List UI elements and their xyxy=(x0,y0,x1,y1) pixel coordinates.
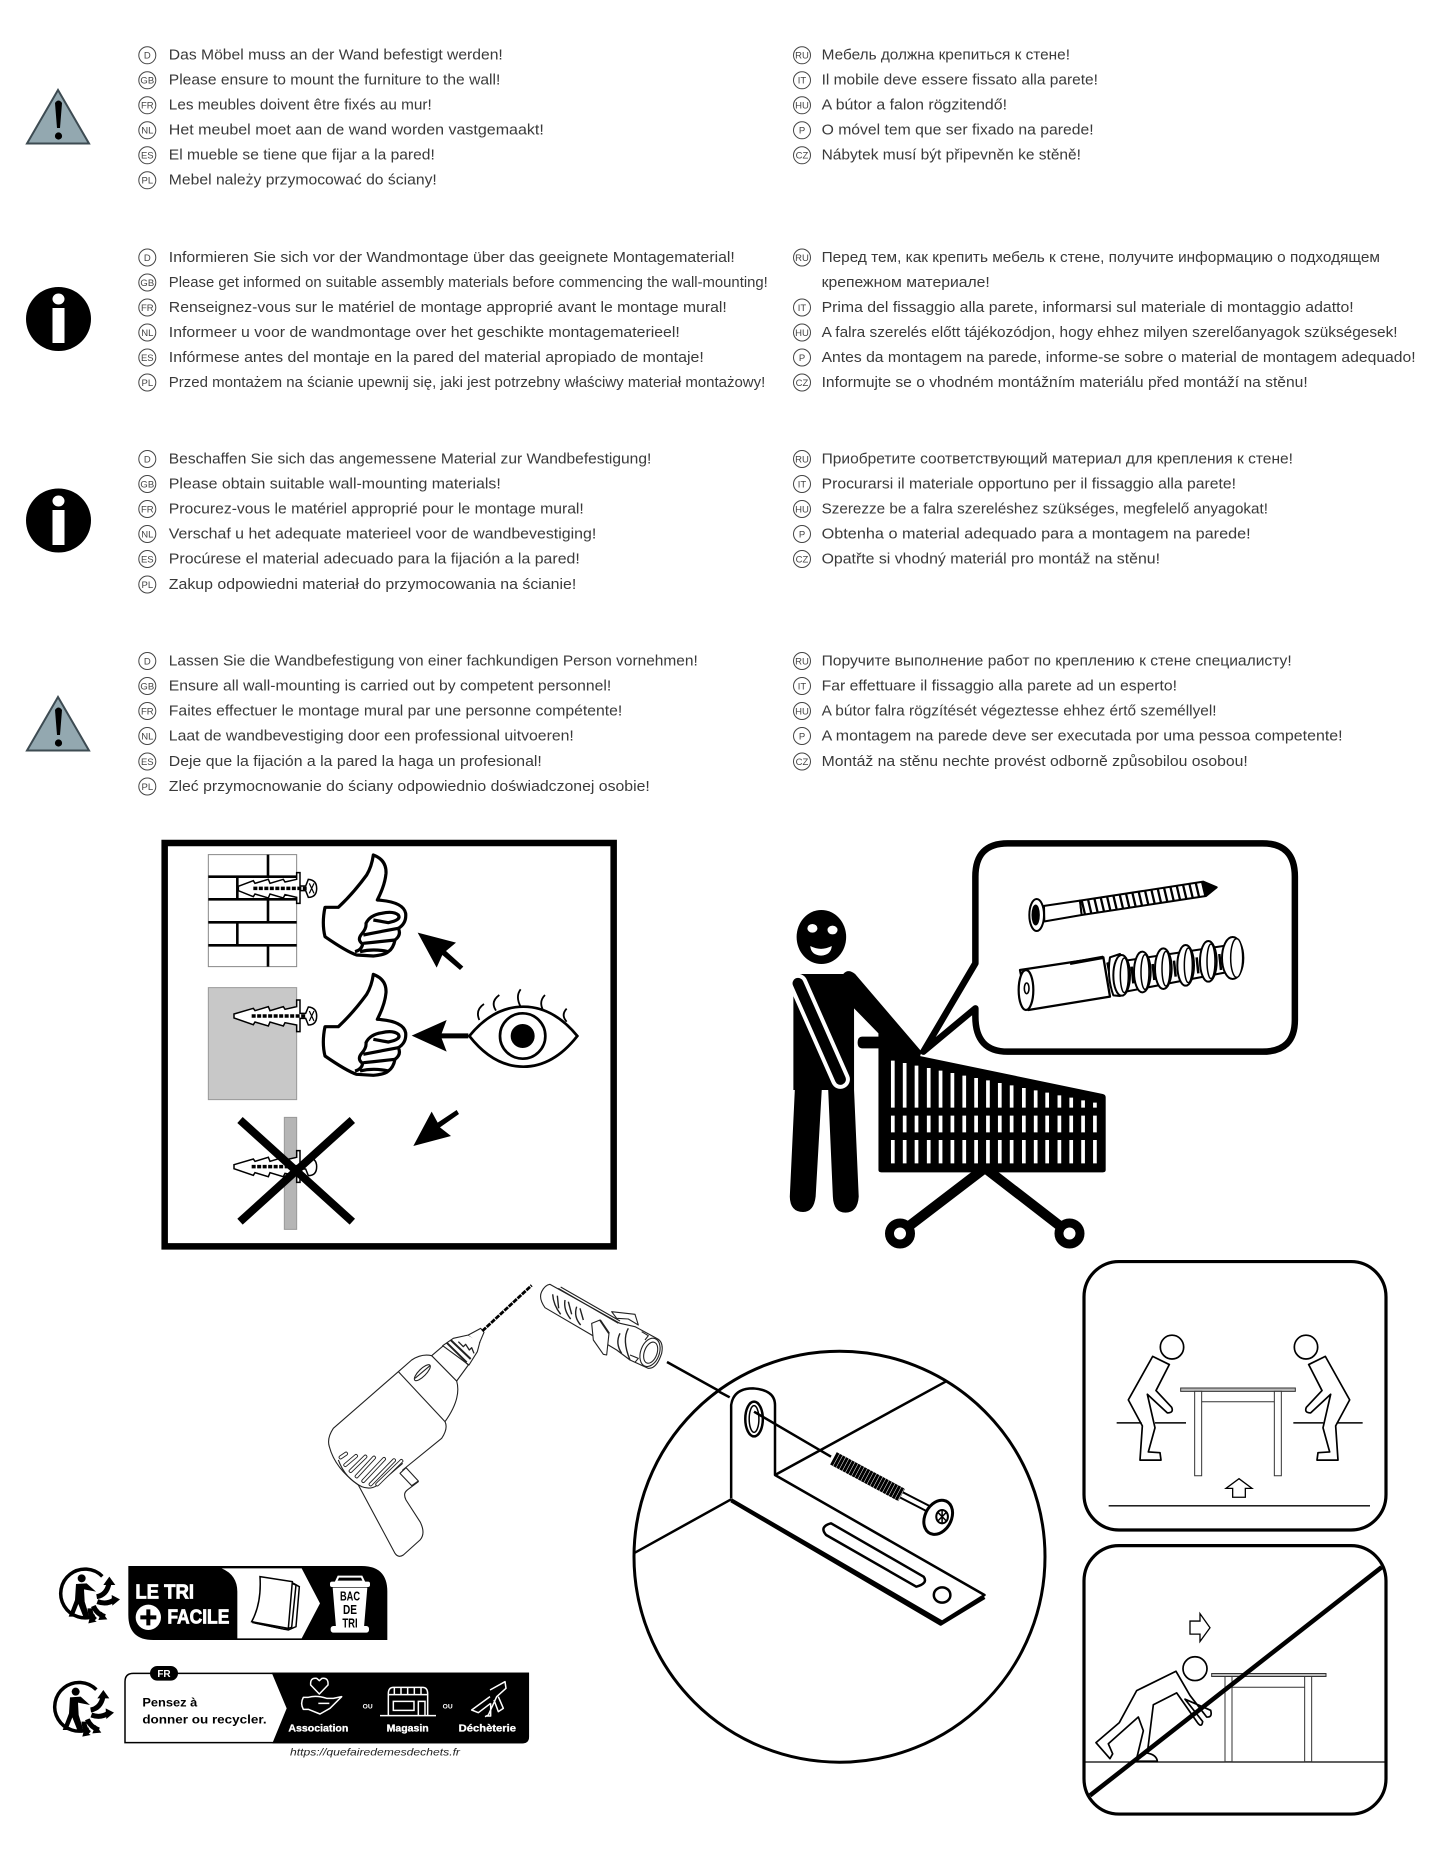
line HU: Szerezze be a falra szereléshez szükséges, megfelelő anyagokat! xyxy=(822,500,1268,518)
line CZ: Opatřte si vhodný materiál pro montáž na stěnu! xyxy=(822,550,1160,568)
line GB: GB xyxy=(140,278,154,289)
line CZ: Montáž na stěnu nechte provést odborně způsobilou osobou! xyxy=(822,753,1248,770)
line P: P xyxy=(799,731,805,742)
thin wall with anchor, crossed out xyxy=(234,1117,352,1229)
icon: paper stack xyxy=(252,1577,299,1630)
icon: waste sorting xyxy=(472,1682,506,1717)
text: magasin: Magasin xyxy=(387,1724,429,1735)
line CZ: CZ xyxy=(796,554,809,565)
label: pensez a donner ou recycler xyxy=(55,1666,529,1759)
icon: triman xyxy=(55,1682,114,1737)
text block: competent personnel, right column xyxy=(794,652,1343,770)
arrow: up left xyxy=(418,933,463,970)
line GB: Please ensure to mount the furniture to the wall! xyxy=(169,72,500,88)
line PL: PL xyxy=(141,782,153,793)
drill bit xyxy=(482,1285,532,1331)
info icon: obtain materials xyxy=(26,488,91,552)
line FR: FR xyxy=(141,706,154,717)
line CZ: Informujte se o vhodném montážním materiálu před montáží na stěnu! xyxy=(822,374,1308,391)
text block: competent personnel, left column xyxy=(139,652,698,795)
line PL: Mebel należy przymocować do ściany! xyxy=(169,172,437,188)
icon: sorting bin: BAC xyxy=(340,1590,360,1604)
line RU: Перед тем, как крепить мебель к стене, получите информацию о подходящем xyxy=(822,249,1380,266)
line D: Das Möbel muss an der Wand befestigt werden! xyxy=(169,46,503,64)
line NL: Informeer u voor de wandmontage over het geschikte montagematerieel! xyxy=(169,324,680,341)
line PL: PL xyxy=(141,176,153,187)
line D: Lassen Sie die Wandbefestigung von einer fachkundigen Person vornehmen! xyxy=(169,652,698,670)
line: drilling axis to bracket xyxy=(667,1362,730,1397)
cart wheels xyxy=(890,1168,1080,1244)
line IT: IT xyxy=(798,479,806,490)
icon: plus xyxy=(136,1605,161,1630)
chuck xyxy=(432,1344,468,1381)
line D: D xyxy=(144,656,151,667)
line NL: Laat de wandbevestiging door een professional uitvoeren! xyxy=(169,728,574,744)
icon: sorting bin xyxy=(330,1577,370,1633)
line PL: PL xyxy=(141,580,153,591)
line FR: FR xyxy=(141,101,154,112)
line FR: Renseignez-vous sur le matériel de montage approprié avant le montage mural! xyxy=(169,299,727,316)
line RU: Приобретите соответствующий материал для крепления к стене! xyxy=(822,450,1293,468)
line IT: Prima del fissaggio alla parete, informarsi sul materiale di montaggio adatto! xyxy=(822,299,1354,316)
line D: Informieren Sie sich vor der Wandmontage über das geeignete Montagematerial! xyxy=(169,249,735,266)
line GB: GB xyxy=(140,76,154,87)
line GB: GB xyxy=(140,681,154,692)
person xyxy=(790,910,922,1213)
line ES: El mueble se tiene que fijar a la pared! xyxy=(169,146,435,164)
text: le tri: LE TRI xyxy=(135,1581,194,1604)
line ES: Procúrese el material adecuado para la fijación a la pared! xyxy=(169,550,580,568)
text block: get informed, left column xyxy=(139,249,768,391)
black band xyxy=(128,1566,387,1640)
text: ou: OU xyxy=(363,1704,373,1711)
text block: obtain materials, right column xyxy=(794,450,1293,568)
black band xyxy=(272,1673,529,1743)
text: advice: Pensez à xyxy=(142,1697,198,1710)
arrow: lift up xyxy=(1226,1479,1252,1497)
line CZ: CZ xyxy=(796,151,809,162)
line RU: RU xyxy=(795,656,809,667)
text: advice xyxy=(142,1697,267,1726)
line: axis into circle xyxy=(719,1392,730,1397)
line RU: RU xyxy=(795,253,809,264)
bracket xyxy=(731,1388,984,1624)
line IT: IT xyxy=(798,681,806,692)
line NL: NL xyxy=(141,126,153,137)
line P: A montagem na parede deve ser executada por uma pessoa competente! xyxy=(822,728,1343,744)
panel: two people lifting table correctly xyxy=(1084,1262,1386,1530)
line RU: Мебель должна крепиться к стене! xyxy=(822,46,1070,64)
line PL: Zakup odpowiedni materiał do przymocowania na ścianie! xyxy=(169,576,576,593)
wall edges xyxy=(634,1382,946,1553)
label: le tri plus facile xyxy=(61,1566,387,1640)
info icon: get informed xyxy=(26,287,91,351)
panel: do not push table alone, crossed out xyxy=(1084,1546,1386,1814)
line NL: NL xyxy=(141,529,153,540)
icon: wall anchor xyxy=(1019,937,1243,1010)
line FR: Procurez-vous le matériel approprié pour le montage mural! xyxy=(169,500,584,518)
line HU: A bútor a falon rögzitendő! xyxy=(822,96,1007,114)
line HU: HU xyxy=(795,101,809,112)
line ES: Infórmese antes del montaje en la pared del material apropiado de montaje! xyxy=(169,349,704,366)
table xyxy=(1212,1674,1326,1762)
line IT: Procurarsi il materiale opportuno per il fissaggio alla parete! xyxy=(822,476,1236,492)
line ES: ES xyxy=(141,151,154,162)
line GB: Ensure all wall-mounting is carried out by competent personnel! xyxy=(169,678,611,694)
text block: obtain materials, left column xyxy=(139,450,651,593)
person: pushing xyxy=(1096,1657,1211,1761)
illustration: detail circle with bracket and screw xyxy=(634,1351,1045,1762)
line CZ: Nábytek musí být připevněn ke stěně! xyxy=(822,146,1081,164)
table xyxy=(1181,1388,1295,1476)
screw xyxy=(754,1412,957,1536)
line P: P xyxy=(799,353,805,364)
line GB: Please get informed on suitable assembly materials before commencing the wall-mounting! xyxy=(169,274,768,291)
line FR: FR xyxy=(141,504,154,515)
panel: wall types viewed by eye xyxy=(165,843,614,1246)
text: dechetterie: Déchèterie xyxy=(459,1724,517,1735)
icon: sorting bin: TRI xyxy=(342,1616,358,1630)
illustration: wall plug xyxy=(541,1284,664,1369)
prohibition line xyxy=(1090,1567,1382,1795)
icon: thumbs up, gray wall xyxy=(323,974,406,1075)
icon: hand with heart xyxy=(302,1678,342,1714)
line CZ: CZ xyxy=(796,757,809,768)
icon: sorting bin: DE xyxy=(343,1603,357,1617)
line RU: Поручите выполнение работ по креплению к стене специалисту! xyxy=(822,652,1292,670)
line IT: IT xyxy=(798,303,806,314)
line HU: HU xyxy=(795,328,809,339)
line FR: Faites effectuer le montage mural par une personne compétente! xyxy=(169,702,622,720)
text: url: https://quefairedemesdechets.fr xyxy=(290,1748,461,1759)
line NL: Verschaf u het adequate materieel voor de wandbevestiging! xyxy=(169,526,596,542)
line ES: ES xyxy=(141,554,154,565)
line RU xyxy=(794,249,1380,291)
person: right xyxy=(1294,1335,1350,1460)
text: association: Association xyxy=(288,1724,348,1735)
line NL: Het meubel moet aan de wand worden vastgemaakt! xyxy=(169,122,544,138)
line RU: RU xyxy=(795,51,809,62)
icon: eye xyxy=(469,989,577,1067)
line IT: Far effettuare il fissaggio alla parete ad un esperto! xyxy=(822,678,1177,694)
line NL: NL xyxy=(141,328,153,339)
gray wall with anchor xyxy=(208,988,317,1100)
floor xyxy=(1084,1761,1386,1763)
icon: shop xyxy=(380,1687,436,1716)
text: ou: OU xyxy=(443,1704,453,1711)
vent slots xyxy=(341,1454,401,1484)
line CZ: CZ xyxy=(796,378,809,389)
line RU: крепежном материале! xyxy=(822,274,990,291)
icon: screw xyxy=(1029,882,1217,931)
country pill: FR xyxy=(157,1669,171,1680)
warning icon: competent personnel xyxy=(27,697,89,750)
line ES: Deje que la fijación a la pared la haga un profesional! xyxy=(169,753,542,770)
line FR: FR xyxy=(141,303,154,314)
line PL: Przed montażem na ścianie upewnij się, jaki jest potrzebny właściwy materiał montażowy! xyxy=(169,374,765,391)
line HU: A falra szerelés előtt tájékozódjon, hogy ehhez milyen szerelőanyagok szükségesek! xyxy=(822,324,1398,341)
line IT: Il mobile deve essere fissato alla parete! xyxy=(822,72,1098,88)
floor xyxy=(1109,1505,1370,1507)
line GB: Please obtain suitable wall-mounting materials! xyxy=(169,476,501,492)
line P: O móvel tem que ser fixado na parede! xyxy=(822,122,1094,138)
line P: P xyxy=(799,529,805,540)
text block: furniture must be wall mounted, right column xyxy=(794,46,1098,164)
person: left xyxy=(1128,1335,1184,1460)
line D: D xyxy=(144,51,151,62)
icon: thumbs up, brick wall xyxy=(323,855,406,956)
text: facile: FACILE xyxy=(167,1606,229,1628)
line HU: A bútor falra rögzítését végeztesse ehhez értő személlyel! xyxy=(822,702,1217,720)
line P: Obtenha o material adequado para a montagem na parede! xyxy=(822,526,1251,542)
line P: Antes da montagem na parede, informe-se sobre o material de montagem adequado! xyxy=(822,349,1416,366)
text block: get informed, right column xyxy=(794,249,1416,391)
arrow: left xyxy=(412,1020,468,1052)
brick wall with anchor xyxy=(208,855,317,967)
line NL: NL xyxy=(141,731,153,742)
line HU: HU xyxy=(795,504,809,515)
line D: Beschaffen Sie sich das angemessene Material zur Wandbefestigung! xyxy=(169,450,651,468)
callout: screw and anchor speech bubble xyxy=(923,843,1295,1052)
line ES: ES xyxy=(141,757,154,768)
illustration: drill xyxy=(329,1285,532,1556)
warning icon: wall mounting xyxy=(27,90,89,144)
line D: D xyxy=(144,253,151,264)
line GB: GB xyxy=(140,479,154,490)
line FR: Les meubles doivent être fixés au mur! xyxy=(169,96,432,114)
line HU: HU xyxy=(795,706,809,717)
line PL: Zleć przymocnowanie do ściany odpowiednio doświadczonej osobie! xyxy=(169,778,650,795)
illustration: person with shopping cart xyxy=(790,910,1106,1244)
line D: D xyxy=(144,454,151,465)
line P: P xyxy=(799,126,805,137)
line ES: ES xyxy=(141,353,154,364)
icon: triman xyxy=(61,1569,120,1623)
ledges xyxy=(1117,1422,1363,1424)
text block: furniture must be wall mounted, left column xyxy=(139,46,544,189)
text: advice: donner ou recycler. xyxy=(142,1713,267,1726)
country pill xyxy=(150,1666,178,1681)
label outline xyxy=(125,1673,528,1743)
line IT: IT xyxy=(798,76,806,87)
line PL: PL xyxy=(141,378,153,389)
arrow: down left xyxy=(413,1110,459,1146)
arrow: push right xyxy=(1190,1614,1210,1642)
line RU: RU xyxy=(795,454,809,465)
white product area xyxy=(222,1568,320,1638)
shopping cart xyxy=(858,1033,1106,1172)
